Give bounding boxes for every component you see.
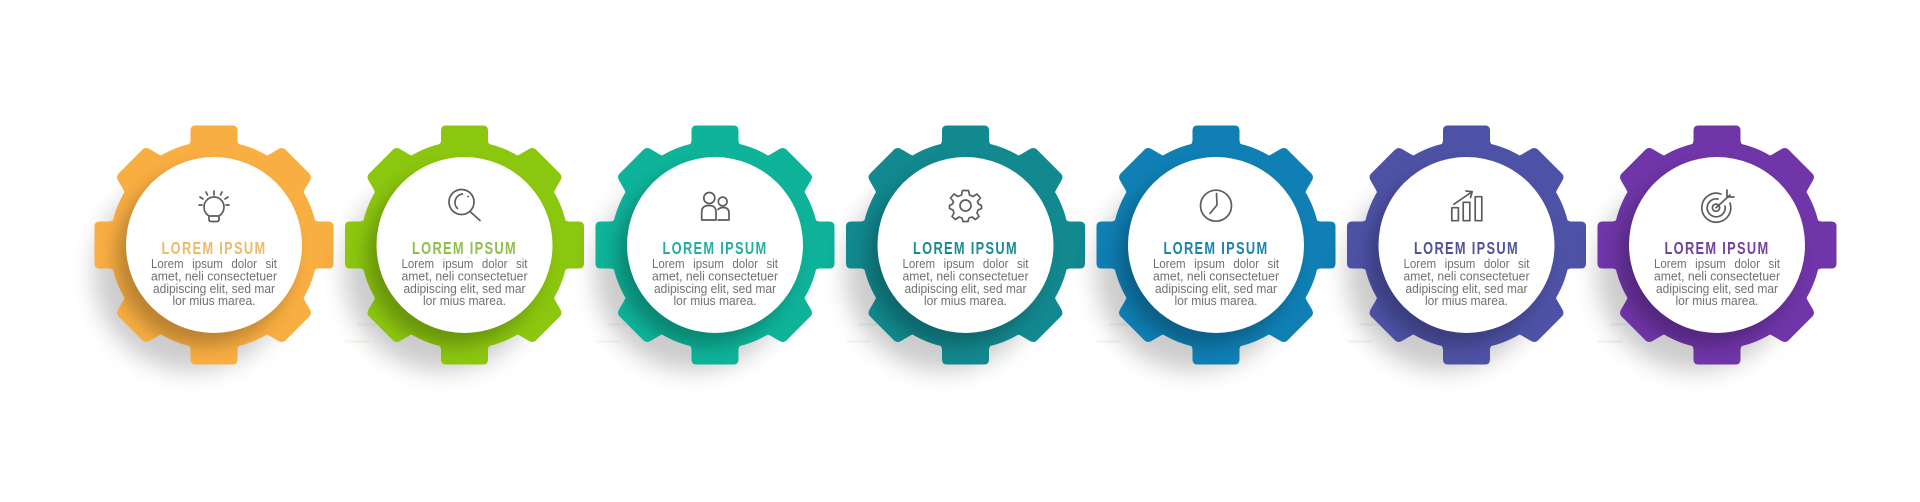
body text: lor mius marea. (1425, 293, 1508, 308)
step 7: target gear (1597, 126, 1836, 371)
body text: Lorem ipsum dolor sit (652, 256, 778, 271)
body text (151, 256, 278, 308)
gear shape teal (596, 126, 834, 364)
body text (1654, 256, 1781, 308)
step 1: idea gear (94, 126, 334, 371)
body text: lor mius marea. (924, 293, 1007, 308)
body text: amet, neli consectetuer (151, 268, 278, 284)
title: LOREM IPSUM (662, 238, 768, 258)
body text: lor mius marea. (1676, 293, 1758, 308)
gear shape green (345, 126, 584, 364)
icon: magnifier (449, 190, 480, 220)
step 5: clock gear (1096, 126, 1336, 371)
gear shape indigo (1347, 126, 1586, 364)
gear shape orange (94, 126, 334, 364)
body text: adipiscing elit, sed mar (1155, 281, 1278, 296)
step 2: search gear (344, 126, 584, 371)
title: LOREM IPSUM (913, 238, 1018, 258)
body text: Lorem ipsum dolor sit (1153, 256, 1279, 271)
body text: lor mius marea. (423, 293, 506, 308)
body text: amet, neli consectetuer (1404, 268, 1530, 284)
body text (902, 256, 1029, 308)
body text (402, 256, 528, 308)
step 6: growth gear (1346, 126, 1586, 371)
step 3: people gear (595, 126, 834, 371)
body text: adipiscing elit, sed mar (1406, 281, 1528, 296)
body text: adipiscing elit, sed mar (904, 281, 1027, 296)
body text: Lorem ipsum dolor sit (151, 256, 277, 271)
body text (652, 256, 779, 308)
body text: adipiscing elit, sed mar (153, 281, 276, 296)
body text: amet, neli consectetuer (1153, 268, 1280, 284)
body text: Lorem ipsum dolor sit (1654, 256, 1780, 271)
body text: Lorem ipsum dolor sit (902, 256, 1029, 271)
body text: amet, neli consectetuer (402, 268, 528, 284)
body text: adipiscing elit, sed mar (654, 281, 777, 296)
title: LOREM IPSUM (162, 238, 266, 258)
body text: adipiscing elit, sed mar (404, 281, 526, 296)
icon: light bulb (199, 191, 229, 222)
icon: clock (1200, 190, 1232, 221)
body text: adipiscing elit, sed mar (1656, 281, 1779, 296)
gear shape purple (1598, 126, 1836, 364)
body text: amet, neli consectetuer (1654, 268, 1781, 284)
body text: amet, neli consectetuer (902, 268, 1029, 284)
body text (1153, 256, 1280, 308)
body text: lor mius marea. (1174, 293, 1258, 308)
body text: Lorem ipsum dolor sit (1404, 256, 1530, 271)
step 4: settings gear (846, 126, 1085, 371)
icon: bar chart (1452, 191, 1482, 221)
title: LOREM IPSUM (1664, 238, 1770, 258)
gear shape dark teal (846, 126, 1085, 364)
title: LOREM IPSUM (1164, 238, 1268, 258)
body text: Lorem ipsum dolor sit (402, 256, 528, 271)
gear shape blue (1096, 126, 1336, 364)
body text: amet, neli consectetuer (652, 268, 779, 284)
title: LOREM IPSUM (1414, 238, 1519, 258)
body text: lor mius marea. (172, 293, 256, 308)
icon: people (702, 192, 729, 220)
body text: lor mius marea. (674, 293, 756, 308)
title: LOREM IPSUM (412, 238, 517, 258)
icon: target (1702, 190, 1734, 222)
icon: cog (950, 190, 982, 222)
body text (1404, 256, 1530, 308)
